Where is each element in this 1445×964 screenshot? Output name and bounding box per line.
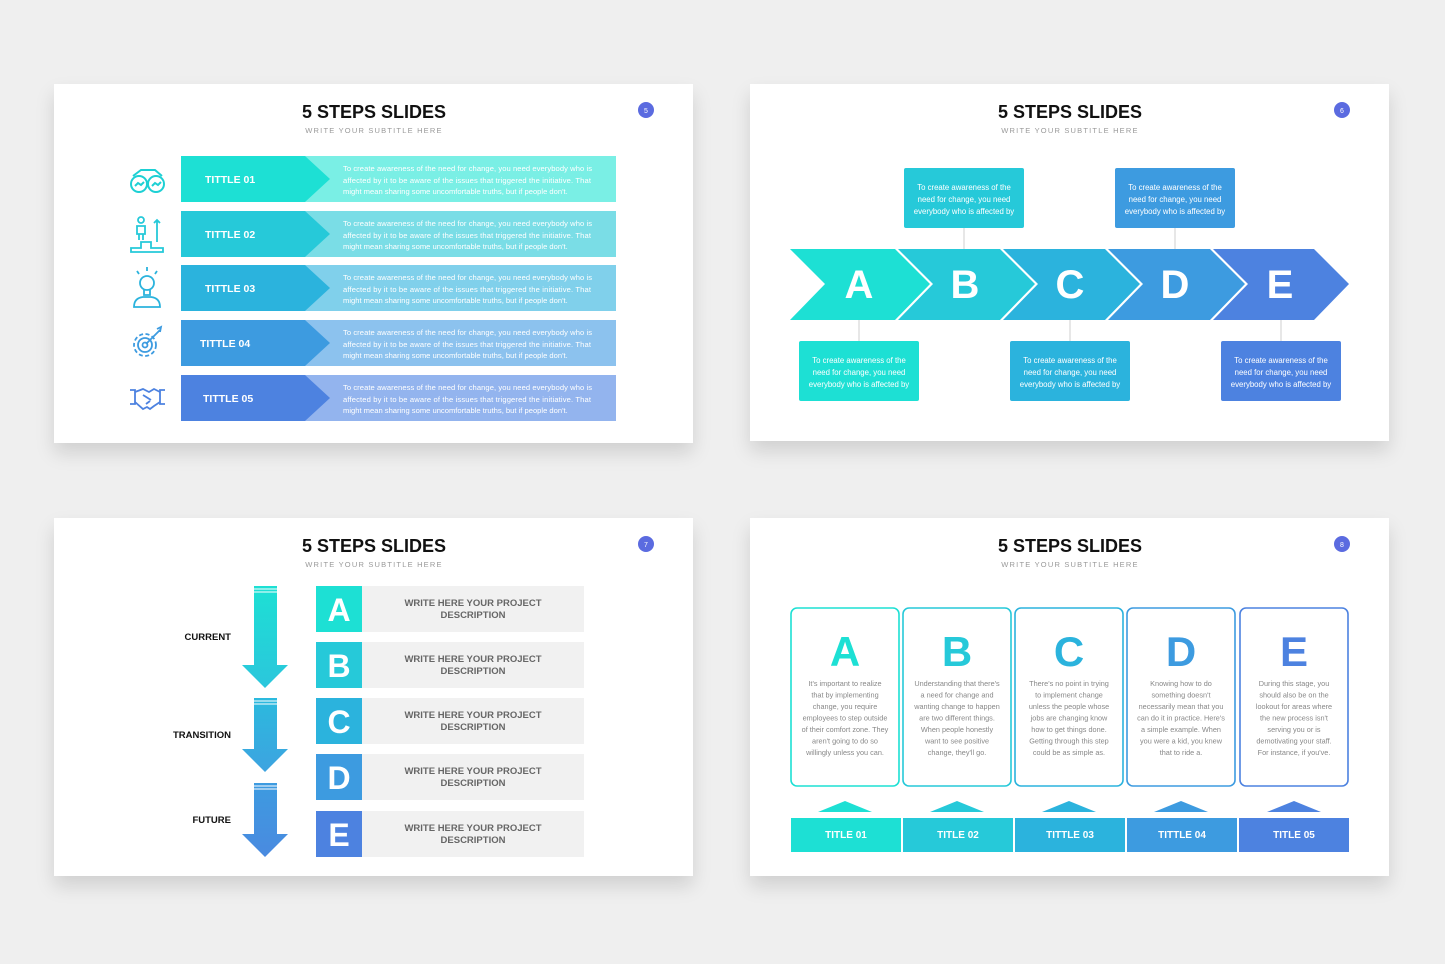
row 2: To create awareness of the need for change, you need everybody who is xyxy=(343,219,592,228)
slide 2 xyxy=(790,102,1350,401)
callout A xyxy=(799,341,919,401)
card C: TITTLE 03 xyxy=(1046,830,1094,841)
card B: When people honestly xyxy=(921,725,993,734)
card D: you were a kid, you knew xyxy=(1140,736,1223,746)
card B: want to see positive xyxy=(924,736,989,746)
row C: DESCRIPTION xyxy=(441,722,506,733)
slide 3 heading xyxy=(302,536,446,569)
callout B: need for change, you need xyxy=(918,195,1010,204)
card C: jobs are changing know xyxy=(1030,714,1108,722)
row 3: TITTLE 03 xyxy=(205,283,255,295)
slide 1 heading: WRITE YOUR SUBTITLE HERE xyxy=(305,126,443,135)
card D: that to ride a. xyxy=(1160,748,1202,757)
row 5: To create awareness of the need for change, you need everybody who is xyxy=(343,383,592,392)
row 4: To create awareness of the need for change, you need everybody who is xyxy=(343,328,592,337)
callout E xyxy=(1221,341,1341,401)
label transition: TRANSITION xyxy=(173,730,231,741)
card A xyxy=(791,608,901,852)
row A: A xyxy=(327,592,351,628)
icon: binoculars xyxy=(131,170,164,192)
card E: the new process isn't xyxy=(1260,714,1328,722)
card E: TITLE 05 xyxy=(1273,830,1315,841)
icon: person on podium xyxy=(131,217,163,252)
card E: demotivating your staff. xyxy=(1256,736,1332,746)
slide 3 xyxy=(173,536,654,857)
card B: Understanding that there's xyxy=(914,679,1000,688)
row C xyxy=(316,698,584,744)
row C: C xyxy=(327,704,351,740)
slide 4 heading: WRITE YOUR SUBTITLE HERE xyxy=(1001,560,1139,569)
icon: handshake xyxy=(130,389,165,409)
row 1: might mean sharing some uncomfortable truths, but if people don't. xyxy=(343,187,568,196)
slide card 4 xyxy=(750,518,1389,876)
page badge 5 xyxy=(638,102,654,118)
card C: C xyxy=(1054,628,1084,675)
card E: For instance, if you've. xyxy=(1258,748,1330,757)
row 4: affected by it to be aware of the issues that triggered the initiative. That xyxy=(343,340,592,349)
callout D: everybody who is affected by xyxy=(1125,207,1225,216)
callout B: To create awareness of the xyxy=(917,183,1011,192)
row E xyxy=(316,811,584,857)
card A: willingly unless you can. xyxy=(805,748,884,757)
callout A: need for change, you need xyxy=(813,368,905,377)
card B: B xyxy=(942,628,972,675)
page badge 8: 8 xyxy=(1340,542,1344,549)
card B: a need for change and xyxy=(920,690,994,700)
slide 3 heading: 5 STEPS SLIDES xyxy=(302,536,446,556)
slide 1 xyxy=(130,102,654,421)
row A xyxy=(316,586,584,632)
page badge 5: 5 xyxy=(644,108,648,115)
card C: Getting through this step xyxy=(1029,736,1109,746)
row 1: TITTLE 01 xyxy=(205,174,255,186)
card B xyxy=(903,608,1013,852)
row C: WRITE HERE YOUR PROJECT xyxy=(404,710,542,721)
row 5: affected by it to be aware of the issues that triggered the initiative. That xyxy=(343,395,592,404)
slide 1 heading xyxy=(302,102,446,135)
card C xyxy=(1015,608,1125,852)
card A: A xyxy=(830,628,860,675)
row 1: affected by it to be aware of the issues that triggered the initiative. That xyxy=(343,176,592,185)
callout C: need for change, you need xyxy=(1024,368,1116,377)
slide 4 heading: 5 STEPS SLIDES xyxy=(998,536,1142,556)
page badge 7: 7 xyxy=(644,542,648,549)
row 2: might mean sharing some uncomfortable truths, but if people don't. xyxy=(343,242,568,251)
row 3 xyxy=(181,265,616,311)
callout D: To create awareness of the xyxy=(1128,183,1222,192)
label current: CURRENT xyxy=(185,632,231,643)
card D: Knowing how to do xyxy=(1150,679,1212,688)
row 2 xyxy=(181,211,616,257)
row 5: TITTLE 05 xyxy=(203,393,253,405)
card C: unless the people whose xyxy=(1029,702,1109,711)
chevron E: E xyxy=(1267,263,1293,307)
page badge 7 xyxy=(638,536,654,552)
chevron D xyxy=(1108,249,1245,320)
callout D xyxy=(1115,168,1235,228)
row B: WRITE HERE YOUR PROJECT xyxy=(404,654,542,665)
card B: change, they'll go. xyxy=(928,748,986,757)
chevron A: A xyxy=(845,263,873,307)
card E: E xyxy=(1280,628,1308,675)
chevron A xyxy=(790,249,930,320)
slide 1 heading: 5 STEPS SLIDES xyxy=(302,102,446,122)
arrow: current xyxy=(242,586,288,688)
chevron E xyxy=(1213,249,1349,320)
card E: serving you or is xyxy=(1267,725,1321,734)
card E xyxy=(1239,608,1349,852)
row E: DESCRIPTION xyxy=(441,835,506,846)
callout B xyxy=(904,168,1024,228)
page badge 6 xyxy=(1334,102,1350,118)
callout C xyxy=(1010,341,1130,401)
callout A: To create awareness of the xyxy=(812,356,906,365)
card A: employees to step outside xyxy=(803,714,887,722)
callout D: need for change, you need xyxy=(1129,195,1221,204)
card D: D xyxy=(1166,628,1196,675)
slide 4 xyxy=(791,536,1350,852)
icon: gear target xyxy=(134,327,161,356)
row 3: might mean sharing some uncomfortable truths, but if people don't. xyxy=(343,296,568,305)
slide card 3 xyxy=(54,518,693,876)
card D: something doesn't xyxy=(1152,690,1210,700)
card B: TITLE 02 xyxy=(937,830,979,841)
callout C: To create awareness of the xyxy=(1023,356,1117,365)
row D xyxy=(316,754,584,800)
card D: TITTLE 04 xyxy=(1158,830,1206,841)
slide 2 heading xyxy=(998,102,1142,135)
row B xyxy=(316,642,584,688)
slide 2 heading: WRITE YOUR SUBTITLE HERE xyxy=(1001,126,1139,135)
card A: change, you require xyxy=(813,702,877,711)
card E: During this stage, you xyxy=(1259,679,1329,688)
slide 2 heading: 5 STEPS SLIDES xyxy=(998,102,1142,122)
card C: could be as simple as. xyxy=(1033,748,1105,757)
callout E: need for change, you need xyxy=(1235,368,1327,377)
card A: It's important to realize xyxy=(808,679,882,688)
row A: WRITE HERE YOUR PROJECT xyxy=(404,598,542,609)
row 4: might mean sharing some uncomfortable truths, but if people don't. xyxy=(343,351,568,360)
card A: aren't going to do so xyxy=(812,736,878,746)
card D: necessarily mean that you xyxy=(1139,702,1223,711)
callout C: everybody who is affected by xyxy=(1020,380,1120,389)
chevron B xyxy=(898,249,1035,320)
arrow: transition xyxy=(242,698,288,772)
slide 3 heading: WRITE YOUR SUBTITLE HERE xyxy=(305,560,443,569)
card B: wanting change to happen xyxy=(913,702,1000,711)
row D: DESCRIPTION xyxy=(441,778,506,789)
callout A: everybody who is affected by xyxy=(809,380,909,389)
card B: are two different things. xyxy=(919,714,995,722)
row 5: might mean sharing some uncomfortable truths, but if people don't. xyxy=(343,406,568,415)
card E: lookout for areas where xyxy=(1256,702,1332,711)
label future: FUTURE xyxy=(192,815,231,826)
slide card 2 xyxy=(750,84,1389,441)
chevron D: D xyxy=(1161,263,1189,307)
connector lines xyxy=(859,228,1281,341)
card A: that by implementing xyxy=(811,690,879,700)
row 1 xyxy=(181,156,616,202)
row B: B xyxy=(327,648,351,684)
page badge 8 xyxy=(1334,536,1350,552)
icon: lightbulb person xyxy=(134,267,160,307)
row A: DESCRIPTION xyxy=(441,610,506,621)
chevron B: B xyxy=(951,263,979,307)
chevron C: C xyxy=(1056,263,1084,307)
page badge 6: 6 xyxy=(1340,108,1344,115)
row 3: To create awareness of the need for change, you need everybody who is xyxy=(343,273,592,282)
row 2: TITTLE 02 xyxy=(205,229,255,241)
row 1: To create awareness of the need for change, you need everybody who is xyxy=(343,164,592,173)
card D: can do it in practice. Here's xyxy=(1137,714,1225,722)
row 2: affected by it to be aware of the issues that triggered the initiative. That xyxy=(343,231,592,240)
row 5 xyxy=(181,375,616,421)
row 4: TITTLE 04 xyxy=(200,338,250,350)
row 4 xyxy=(181,320,616,366)
row 3: affected by it to be aware of the issues that triggered the initiative. That xyxy=(343,285,592,294)
callout E: To create awareness of the xyxy=(1234,356,1328,365)
card D: a simple example. When xyxy=(1141,725,1221,734)
callout E: everybody who is affected by xyxy=(1231,380,1331,389)
row B: DESCRIPTION xyxy=(441,666,506,677)
slide 4 heading xyxy=(998,536,1142,569)
card C: There's no point in trying xyxy=(1029,679,1109,688)
card A: of their comfort zone. They xyxy=(802,725,889,734)
slide card 1 xyxy=(54,84,693,443)
arrow: future xyxy=(242,783,288,857)
row E: WRITE HERE YOUR PROJECT xyxy=(404,823,542,834)
card E: should also be on the xyxy=(1259,690,1329,700)
card C: how to get things done. xyxy=(1031,725,1107,734)
row D: D xyxy=(327,760,351,796)
card D xyxy=(1127,608,1237,852)
callout B: everybody who is affected by xyxy=(914,207,1014,216)
row E: E xyxy=(328,817,350,853)
card C: to implement change xyxy=(1035,690,1103,700)
chevron C xyxy=(1003,249,1140,320)
row D: WRITE HERE YOUR PROJECT xyxy=(404,766,542,777)
card A: TITLE 01 xyxy=(825,830,867,841)
